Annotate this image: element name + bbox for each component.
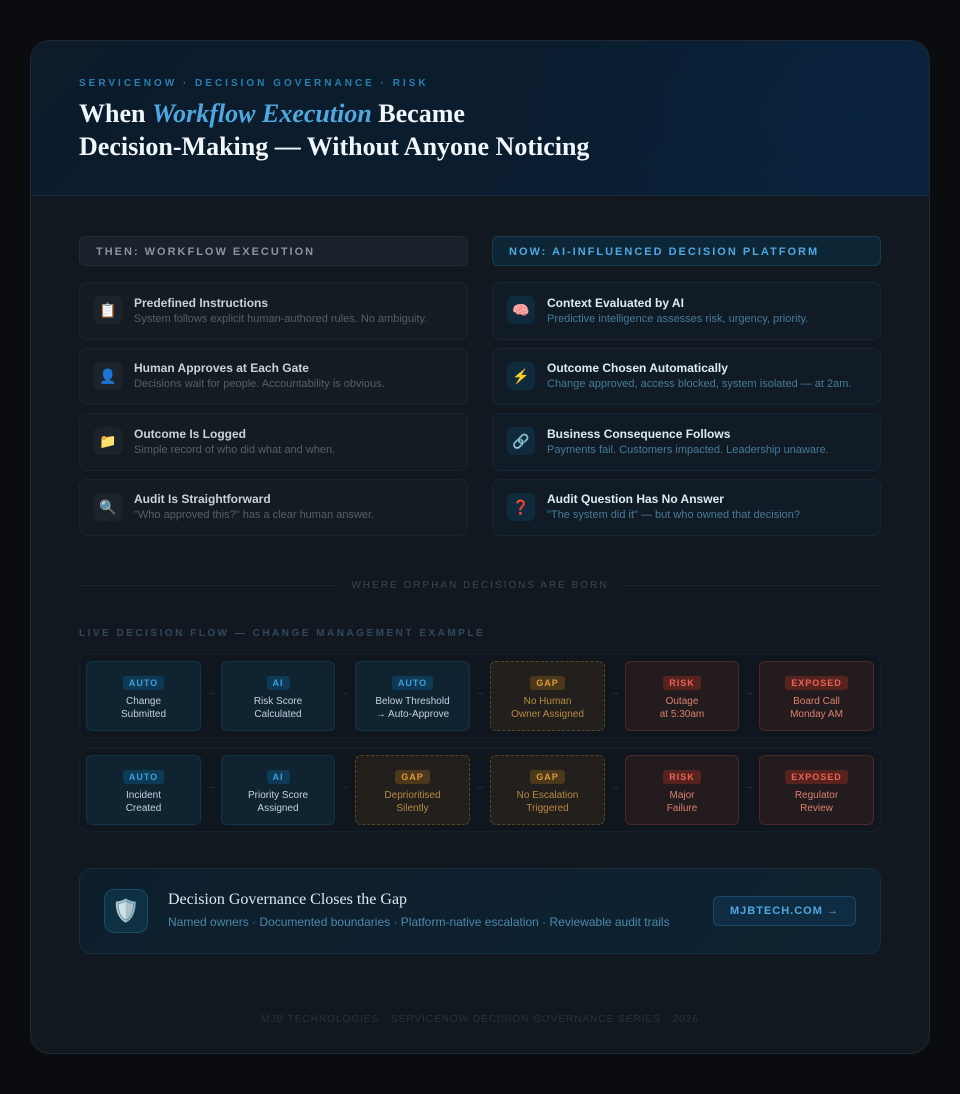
- now item: outcome chosen: [492, 348, 881, 405]
- icon: link: 🔗: [512, 433, 530, 449]
- item title: Outcome Is Logged: [134, 426, 246, 440]
- item description: "Who approved this?" has a clear human answer.: [134, 509, 374, 521]
- header panel: [31, 41, 929, 196]
- step: below threshold: AUTO: [398, 678, 427, 688]
- button: MJBTECH.COM →: [730, 905, 839, 917]
- divider label: WHERE ORPHAN DECISIONS ARE BORN: [351, 580, 609, 591]
- step: outage: at 5:30am: [660, 708, 704, 720]
- step: regulator review: EXPOSED: [791, 772, 842, 782]
- item title: Outcome Chosen Automatically: [547, 361, 728, 375]
- step: no human owner: GAP: [536, 678, 559, 688]
- step: major failure: RISK: [669, 772, 695, 782]
- icon: clipboard: [94, 296, 122, 324]
- step: below threshold: → Auto-Approve: [376, 708, 449, 720]
- step: no human owner: No Human: [524, 696, 571, 707]
- icon: brain: [507, 296, 535, 324]
- step: risk score: Risk Score: [254, 696, 302, 707]
- step: no human owner: [490, 661, 605, 731]
- item description: Decisions wait for people. Accountability is obvious.: [134, 378, 385, 390]
- step: regulator review: [759, 755, 874, 825]
- step: major failure: Failure: [667, 802, 697, 814]
- step: regulator review: Regulator: [795, 790, 838, 801]
- column heading: then: [79, 236, 468, 266]
- now item: business consequence: [492, 413, 881, 470]
- step: change submitted: [86, 661, 201, 731]
- arrow: →: [340, 686, 350, 698]
- step: priority score: [221, 755, 335, 825]
- item title: Audit Question Has No Answer: [547, 492, 724, 506]
- step: board call: [759, 661, 874, 731]
- step: below threshold: [355, 661, 470, 731]
- step: board call: EXPOSED: [791, 678, 842, 688]
- step: regulator review: Review: [800, 802, 833, 814]
- icon: folder: 📁: [99, 433, 117, 449]
- icon: lightning: ⚡: [512, 368, 530, 384]
- step: incident created: Incident: [126, 790, 161, 801]
- icon: shield: 🛡️: [112, 898, 140, 923]
- step: no human owner: Owner Assigned: [511, 708, 584, 720]
- item description: "The system did it" — but who owned that decision?: [547, 509, 800, 521]
- step: no escalation: [490, 755, 605, 825]
- step: outage: [625, 661, 739, 731]
- icon: magnifier: 🔍: [99, 498, 117, 514]
- step: deprioritised: Deprioritised: [384, 790, 441, 801]
- step: board call: Board Call: [793, 696, 840, 707]
- step: no escalation: Triggered: [526, 802, 569, 814]
- icon: question mark: ❓: [512, 498, 530, 514]
- step: incident created: [86, 755, 201, 825]
- icon: magnifier: [94, 492, 122, 520]
- column heading: then: THEN: WORKFLOW EXECUTION: [96, 246, 315, 258]
- icon: link: [507, 427, 535, 455]
- step: deprioritised: [355, 755, 470, 825]
- arrow: →: [610, 780, 620, 792]
- arrow: →: [206, 686, 216, 698]
- title: [79, 99, 590, 161]
- then item: predefined instructions: [79, 282, 468, 340]
- step: change submitted: AUTO: [129, 678, 158, 688]
- item title: Predefined Instructions: [134, 296, 268, 310]
- step: deprioritised: GAP: [401, 772, 424, 782]
- icon: question mark: [507, 492, 535, 520]
- step: priority score: AI: [272, 772, 284, 782]
- item title: Audit Is Straightforward: [134, 492, 271, 506]
- item title: Context Evaluated by AI: [547, 296, 684, 310]
- item description: System follows explicit human-authored rules. No ambiguity.: [134, 312, 427, 324]
- step: incident created: Created: [126, 802, 161, 814]
- step: outage: Outage: [666, 696, 698, 707]
- step: no escalation: GAP: [536, 772, 559, 782]
- arrow: →: [206, 780, 216, 792]
- icon: lightning: [507, 362, 535, 390]
- icon: person: 👤: [99, 368, 117, 384]
- arrow: →: [474, 686, 486, 698]
- item description: Change approved, access blocked, system isolated — at 2am.: [547, 378, 852, 390]
- button: [713, 896, 856, 926]
- footer: MJB TECHNOLOGIES · SERVICENOW DECISION GOVERNANCE SERIES · 2026: [261, 1014, 699, 1025]
- arrow: →: [474, 780, 486, 792]
- arrow: →: [744, 780, 754, 792]
- then item: audit straightforward: [79, 478, 468, 536]
- callout: decision governance: [79, 868, 881, 954]
- arrow: →: [744, 686, 754, 698]
- step: risk score: Calculated: [254, 708, 302, 720]
- title: Decision-Making — Without Anyone Noticing: [79, 132, 589, 161]
- step: risk score: AI: [272, 678, 284, 688]
- flow heading: LIVE DECISION FLOW — CHANGE MANAGEMENT EXAMPLE: [79, 628, 485, 639]
- item description: Payments fail. Customers impacted. Leadership unaware.: [547, 444, 829, 456]
- arrow: →: [340, 780, 350, 792]
- step: major failure: [625, 755, 739, 825]
- step: board call: Monday AM: [790, 708, 843, 720]
- icon: person: [94, 362, 122, 390]
- item description: Predictive intelligence assesses risk, urgency, priority.: [547, 312, 808, 324]
- step: incident created: AUTO: [129, 772, 158, 782]
- flow row 2: [79, 748, 881, 832]
- icon: shield: [104, 889, 148, 933]
- icon: folder: [94, 427, 122, 455]
- step: outage: RISK: [669, 678, 695, 688]
- item title: Business Consequence Follows: [547, 426, 730, 440]
- arrow: →: [610, 686, 620, 698]
- now item: audit question: [492, 478, 881, 536]
- title: When Workflow Execution Became: [79, 99, 465, 128]
- step: change submitted: Change: [126, 696, 161, 707]
- step: priority score: Priority Score: [248, 790, 308, 801]
- then item: human approves: [79, 348, 468, 405]
- step: change submitted: Submitted: [121, 708, 166, 720]
- item title: Human Approves at Each Gate: [134, 361, 309, 375]
- step: deprioritised: Silently: [396, 802, 429, 814]
- now item: context evaluated: [492, 282, 881, 340]
- eyebrow label: SERVICENOW · DECISION GOVERNANCE · RISK: [79, 78, 429, 89]
- step: major failure: Major: [669, 790, 694, 801]
- icon: clipboard: 📋: [99, 302, 117, 318]
- flow row 1: [79, 654, 881, 738]
- then item: outcome logged: [79, 413, 468, 470]
- item description: Simple record of who did what and when.: [134, 444, 335, 456]
- step: risk score: [221, 661, 335, 731]
- icon: brain: 🧠: [512, 302, 530, 318]
- column heading: now: [492, 236, 881, 266]
- column heading: now: NOW: AI-INFLUENCED DECISION PLATFORM: [509, 246, 819, 258]
- callout heading: Decision Governance Closes the Gap: [168, 891, 407, 908]
- step: below threshold: Below Threshold: [375, 696, 450, 707]
- callout text: Named owners · Documented boundaries · Platform-native escalation · Reviewable audit trails: [168, 915, 670, 929]
- step: no escalation: No Escalation: [517, 790, 578, 801]
- step: priority score: Assigned: [257, 802, 299, 814]
